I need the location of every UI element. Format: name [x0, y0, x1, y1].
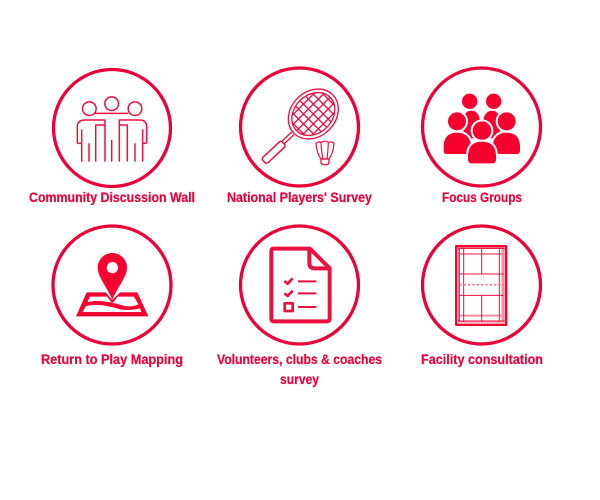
circle ring [54, 70, 170, 186]
circle ring [240, 226, 358, 344]
label: Community Discussion Wall [29, 190, 195, 205]
icon: three people with arms linked [77, 97, 147, 162]
icon: map with location pin [76, 253, 148, 316]
icon: group of people [444, 94, 520, 163]
label, line one: Volunteers, clubs & coaches [217, 352, 382, 367]
circle ring [53, 226, 171, 344]
circle ring [422, 68, 540, 186]
label: Facility consultation [421, 352, 543, 367]
panel: Facility consultation [421, 226, 543, 367]
label, line two: survey [280, 372, 319, 387]
label: National Players' Survey [227, 190, 372, 205]
panel: Focus Groups [422, 68, 540, 205]
panel: Return to Play Mapping [41, 226, 183, 367]
icon: badminton court plan [456, 246, 506, 325]
icon: survey document with checklist [271, 249, 330, 321]
circle ring [422, 226, 540, 344]
panel: Volunteers, clubs & coaches survey [217, 226, 382, 387]
icon: racket and shuttlecock [262, 88, 339, 166]
label: Return to Play Mapping [41, 352, 183, 367]
label: Focus Groups [442, 190, 522, 205]
panel: National Players' Survey [227, 66, 372, 205]
panel: Community Discussion Wall [29, 70, 195, 205]
circle ring [240, 68, 358, 186]
